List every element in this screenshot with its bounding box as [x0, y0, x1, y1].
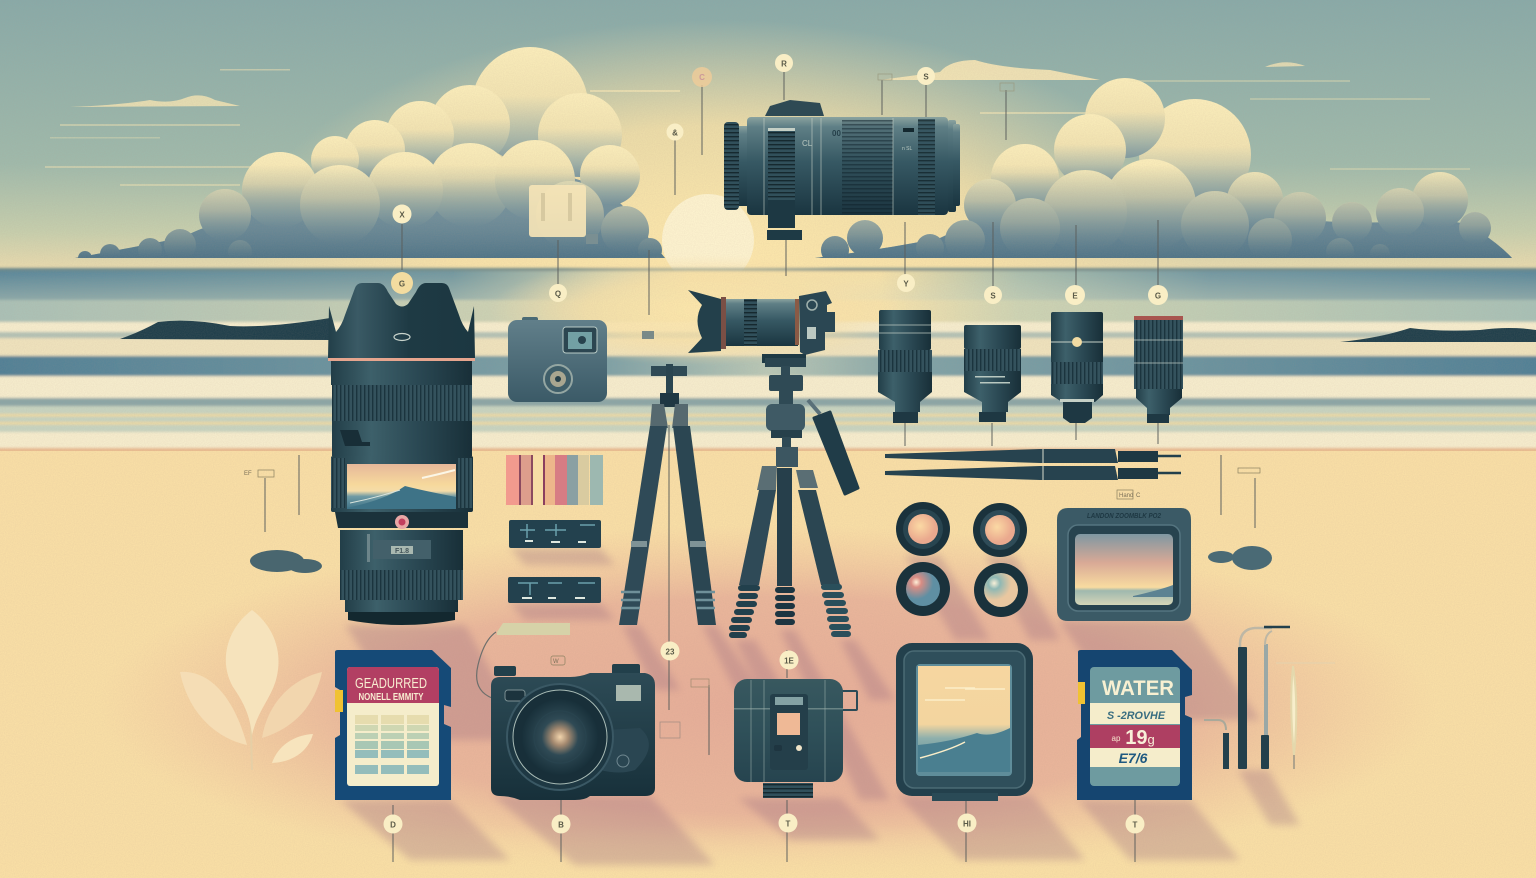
barrel sections — [331, 361, 472, 385]
tripod legs — [757, 466, 777, 490]
large lens with hood — [328, 283, 475, 625]
callout badges: C — [699, 73, 705, 82]
lens 1 — [878, 310, 932, 423]
callout badges: X — [399, 210, 405, 220]
colour swatches — [506, 455, 603, 505]
SD card right: WATER — [1102, 677, 1174, 700]
SD card left: GEADURRED — [355, 675, 427, 692]
callout badges: D — [390, 820, 396, 830]
pebbles left — [250, 550, 322, 573]
clouds: left cluster — [60, 47, 690, 265]
callout badges: Y — [903, 280, 909, 288]
callout badges: S — [990, 292, 996, 300]
telephoto lens floating: n SL — [902, 146, 913, 152]
leaf plant — [180, 610, 322, 770]
small dark panel upper — [509, 520, 601, 548]
small tag labels: EF — [244, 471, 252, 477]
callout badges: S — [923, 72, 929, 82]
SD card right: 19g — [1125, 727, 1155, 749]
small dark panel lower — [508, 577, 601, 603]
callout badges: E — [1072, 292, 1078, 300]
filter holder top right: LANDON ZOOMBLK PO2 — [1087, 513, 1161, 520]
compact camera bottom — [491, 664, 655, 800]
lens 4 — [1134, 316, 1183, 423]
round filter 1 — [896, 502, 950, 556]
lens 2 — [964, 325, 1021, 422]
card table — [355, 715, 429, 774]
small tag labels — [244, 74, 1260, 738]
sand background — [0, 451, 1536, 878]
callout badges: Q — [555, 290, 561, 298]
telephoto lens floating — [724, 100, 960, 240]
SD card right: E7/6 — [1119, 750, 1148, 766]
right tripod with ball head — [732, 358, 858, 635]
red button — [395, 515, 409, 529]
lens display — [373, 540, 431, 559]
callout badges: 1E — [784, 656, 795, 666]
callout badges: T — [786, 820, 791, 828]
callout badges: T — [1133, 820, 1138, 830]
sun — [662, 194, 754, 286]
telephoto lens floating: CL — [802, 139, 813, 148]
lens hood — [328, 283, 475, 358]
round filter 2 — [973, 503, 1027, 557]
SD card left — [335, 650, 451, 800]
background sky — [0, 0, 1536, 490]
compact camera — [508, 317, 607, 402]
small bracket accessory — [529, 185, 598, 244]
callout badges: G — [399, 280, 405, 288]
callout badges: & — [672, 128, 678, 138]
lens screen picture — [347, 464, 456, 509]
callout badges — [384, 54, 1168, 834]
pebbles right — [1208, 546, 1272, 570]
small tools right — [1204, 627, 1335, 769]
callout badges: G — [1155, 292, 1161, 300]
sunset frame — [896, 643, 1033, 801]
callout badges: B — [558, 820, 564, 830]
lens 3 — [1051, 312, 1103, 423]
cast shadows — [340, 548, 1300, 865]
annotation lines — [265, 72, 1255, 862]
SD card right — [1077, 650, 1192, 800]
hood logo — [394, 334, 410, 340]
distant dark islands — [120, 318, 1536, 342]
callout badges: R — [781, 60, 787, 68]
clouds: right cluster — [800, 78, 1520, 266]
long rods — [885, 449, 1181, 480]
mounted camera with lens — [688, 290, 835, 363]
filter holder top right — [1057, 508, 1191, 621]
small tag labels: C — [1136, 493, 1141, 499]
round filter 3 — [896, 562, 950, 616]
sea bands — [0, 255, 1536, 452]
callout badges: HI — [963, 820, 971, 828]
left tripod — [619, 364, 716, 625]
callout badges: 23 — [666, 648, 675, 656]
SD card left: NONELL EMMITY — [358, 692, 424, 703]
lens display: F1.8 — [395, 548, 409, 555]
thin streak clouds — [45, 60, 1470, 186]
SD card right: ap — [1112, 734, 1121, 743]
telephoto lens floating: 00 — [832, 129, 841, 138]
battery box — [734, 679, 857, 798]
round filter 4 — [974, 563, 1028, 617]
small tag labels: W — [553, 659, 559, 665]
small tag labels: Hand — [1119, 493, 1133, 499]
SD card right: S -2ROVHE — [1107, 710, 1166, 722]
camera strap and tag — [477, 623, 585, 698]
tripod handle — [808, 400, 858, 494]
